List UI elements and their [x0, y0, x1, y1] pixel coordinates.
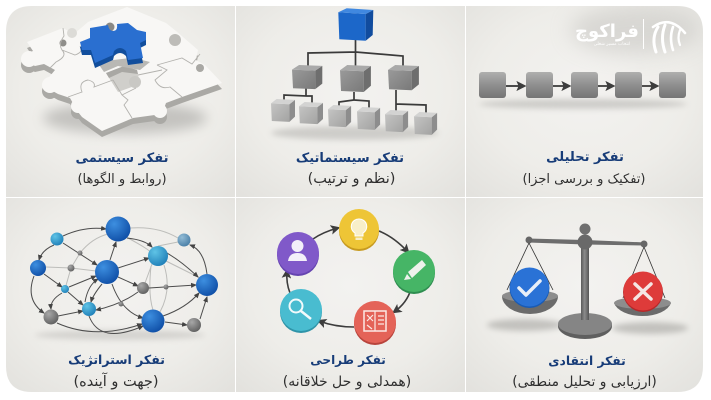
- panel: systematic thinking: [271, 8, 439, 187]
- panel: strategic thinking: [30, 216, 218, 390]
- panel: critical thinking: [487, 224, 688, 390]
- yellow bulb node: [339, 209, 379, 251]
- icon: balance scale: [487, 224, 688, 339]
- right pan with cross: [614, 247, 671, 316]
- icon: hierarchy of cubes: [271, 8, 439, 140]
- icon: puzzle: [21, 7, 222, 137]
- heading: design thinking: تفکر طراحی: [310, 353, 386, 367]
- red worksheet node: [354, 301, 396, 345]
- subheading: decomposition: (تفکیک و بررسی اجزا): [523, 172, 645, 187]
- blue root cube: [338, 8, 373, 41]
- teal search node: [280, 289, 322, 333]
- heading: analytical thinking: تفکر تحلیلی: [546, 150, 624, 165]
- subheading: relations and patterns: (روابط و الگوها): [77, 171, 167, 187]
- subheading: direction and future: (جهت و آینده): [73, 372, 159, 390]
- heading: systematic thinking: تفکر سیستماتیک: [296, 151, 404, 166]
- green pencil node: [393, 250, 435, 294]
- logo: انتخاب مسیر شغلی: [594, 42, 630, 47]
- scale base and pole: [526, 224, 648, 339]
- network diagram: [30, 216, 218, 340]
- nodes: [30, 216, 218, 332]
- purple person node: [277, 232, 319, 276]
- left pan with check: [502, 243, 558, 314]
- panel: systems thinking: [21, 7, 222, 187]
- logo: فراکوچ: [575, 21, 639, 42]
- cycle diagram: [277, 209, 435, 345]
- subheading: empathy and creative solutions: (همدلی و حل خلاقانه): [283, 374, 411, 390]
- subheading: evaluation and logical analysis: (ارزیابی و تحلیل منطقی): [512, 374, 657, 390]
- icon: chain of cubes: [479, 72, 687, 109]
- heading: critical thinking: تفکر انتقادی: [548, 354, 626, 368]
- heading: systems thinking: تفکر سیستمی: [76, 151, 168, 166]
- panel: design thinking: [277, 209, 435, 390]
- panel: analytical thinking: [479, 19, 687, 187]
- heading: strategic thinking: تفکر استراتژیک: [68, 352, 165, 367]
- subheading: order: (نظم و ترتیب): [308, 171, 395, 187]
- blue puzzle piece: [80, 23, 146, 68]
- logo: [575, 19, 685, 52]
